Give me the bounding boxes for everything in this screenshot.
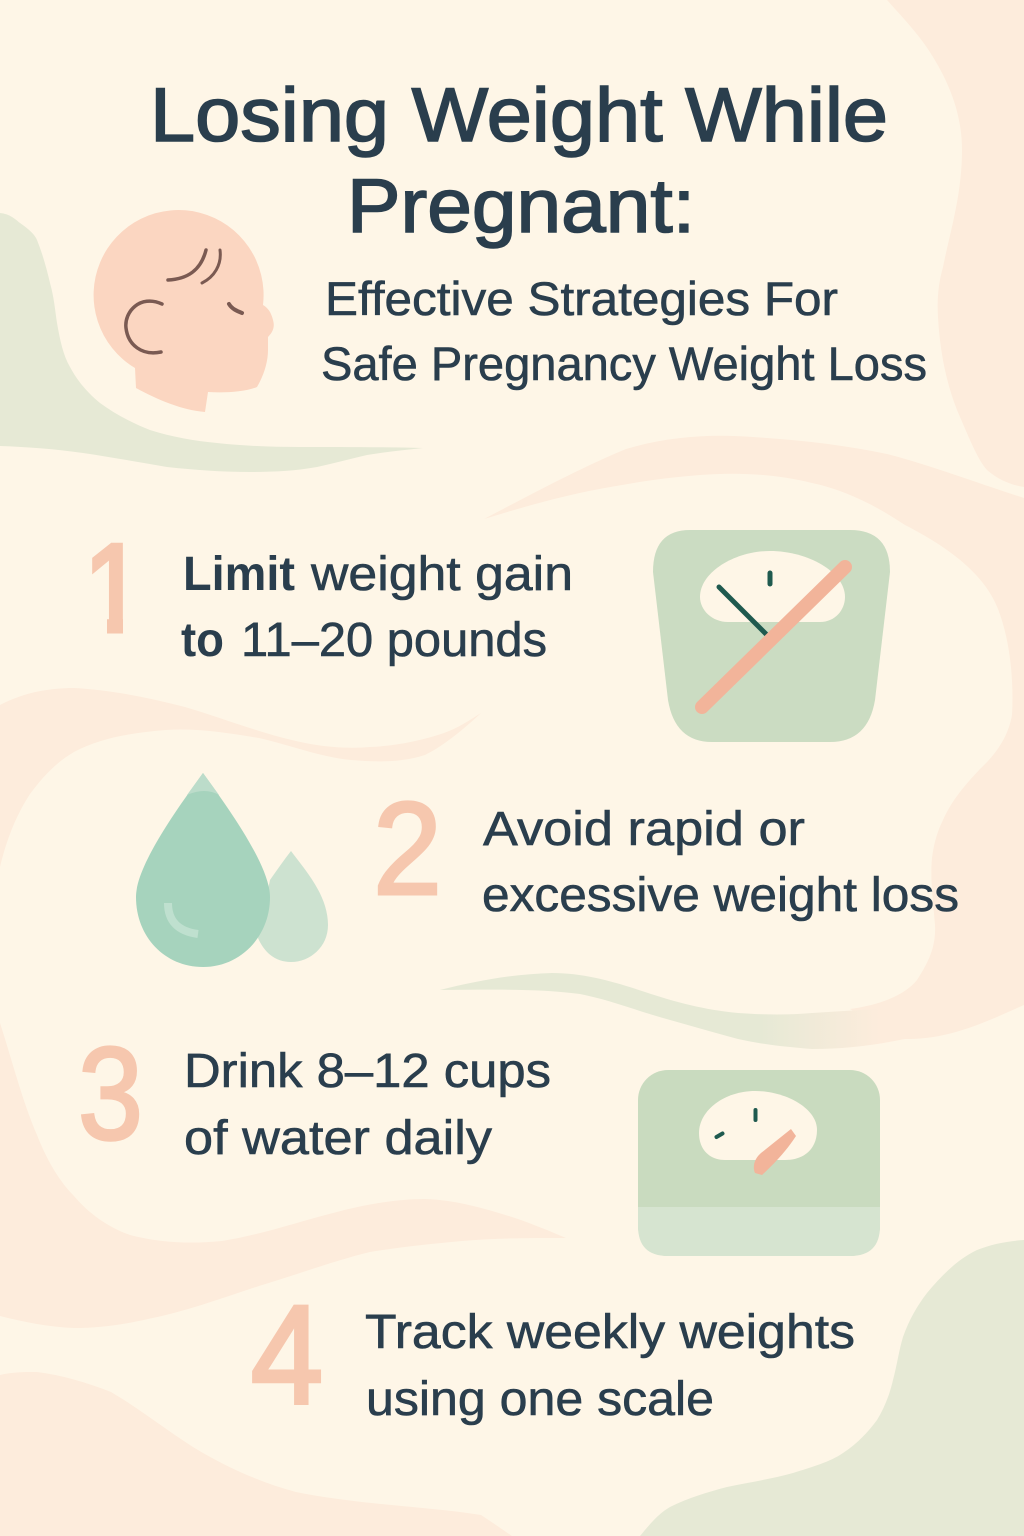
icon: crossed-out scale <box>653 530 890 742</box>
icon: scale with pointer <box>638 1070 880 1256</box>
step 4 text: using one scale <box>366 1373 714 1426</box>
step 4 text <box>365 1306 855 1426</box>
step 4 number: 4 <box>251 1276 323 1433</box>
background shape: right peach wave <box>484 436 1024 1039</box>
step 1 text: weight gain <box>310 548 573 601</box>
step 1 text: 11–20 pounds <box>241 614 547 667</box>
step 3 text <box>184 1045 551 1165</box>
step 2 text: Avoid rapid or <box>483 803 805 856</box>
step 3 number: 3 <box>78 1020 143 1167</box>
step 4 text: Track weekly weights <box>365 1306 855 1359</box>
background shape: green wave <box>440 973 1024 1049</box>
step 1 text <box>181 548 573 667</box>
step 1 number: 1 <box>84 520 144 658</box>
background shape: top left green <box>0 213 423 472</box>
background shape: lower left peach <box>0 1023 566 1328</box>
step 2 number: 2 <box>373 775 442 922</box>
step 3 text: of water daily <box>184 1112 492 1165</box>
icon: baby head <box>94 210 274 412</box>
step 2 text: excessive weight loss <box>482 869 959 922</box>
icon: water drops <box>136 773 328 967</box>
background shape: bottom left peach <box>0 1372 512 1536</box>
subtitle: Effective Strategies For <box>325 272 838 325</box>
step 3 text: Drink 8–12 cups <box>184 1045 551 1098</box>
step 1 text: to <box>181 614 224 667</box>
step 2 text <box>482 803 959 922</box>
title: Losing Weight While <box>150 73 888 158</box>
title: Pregnant: <box>347 164 695 249</box>
subtitle <box>321 272 927 390</box>
step 1 text: Limit <box>183 548 295 601</box>
background shape: left peach wave <box>0 688 481 867</box>
background shape: top right peach <box>887 0 1024 487</box>
background shape: bottom right green <box>640 1240 1024 1536</box>
title <box>150 73 888 249</box>
subtitle: Safe Pregnancy Weight Loss <box>321 337 927 390</box>
